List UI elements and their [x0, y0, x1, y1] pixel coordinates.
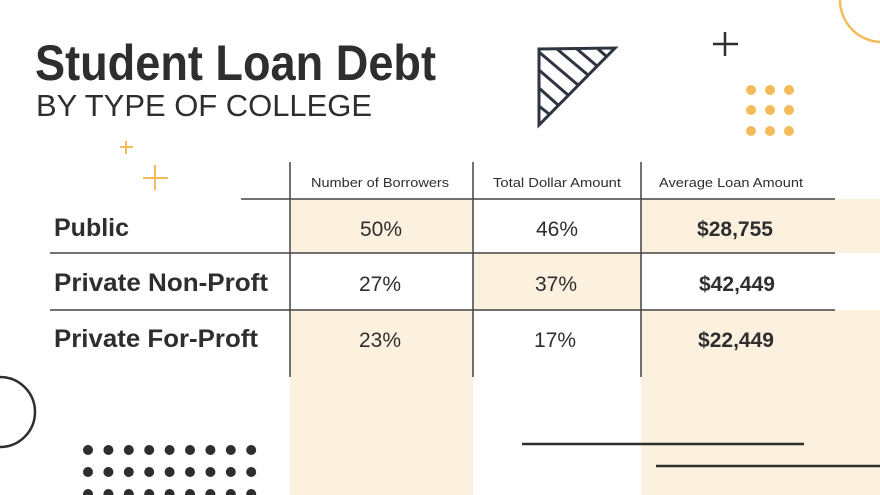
- icon: dark circle left: [0, 377, 35, 447]
- table values: 37%: [535, 273, 577, 296]
- table headers: Number of Borrowers: [311, 175, 450, 190]
- table headers: Total Dollar Amount: [493, 175, 621, 190]
- icon: orange pluses: [120, 141, 168, 190]
- table values: $22,449: [698, 329, 774, 352]
- table values: 27%: [359, 273, 401, 296]
- subtitle: BY TYPE OF COLLEGE: [36, 88, 372, 123]
- row labels: Public: [54, 214, 129, 242]
- icon: orange circle top right: [840, 0, 880, 42]
- table values: $42,449: [699, 273, 775, 296]
- decorative bottom lines: [522, 444, 880, 466]
- icon: orange dot grid: [746, 85, 794, 136]
- icon: dark plus: [713, 32, 738, 56]
- table values: $28,755: [697, 218, 773, 241]
- icon: dark dot grid: [83, 445, 256, 495]
- table values: 17%: [534, 329, 576, 352]
- table values: 23%: [359, 329, 401, 352]
- table headers: [311, 175, 803, 190]
- title: Student Loan Debt: [35, 35, 436, 91]
- row labels: Private For-Proft: [54, 325, 259, 353]
- table values: [359, 218, 775, 352]
- beige column highlights: [290, 199, 880, 495]
- table grid lines: [50, 162, 835, 377]
- row labels: [54, 214, 269, 353]
- table values: 50%: [360, 218, 402, 241]
- table headers: Average Loan Amount: [659, 175, 803, 190]
- row labels: Private Non-Proft: [54, 269, 269, 297]
- table values: 46%: [536, 218, 578, 241]
- icon: hatched triangle: [539, 48, 615, 125]
